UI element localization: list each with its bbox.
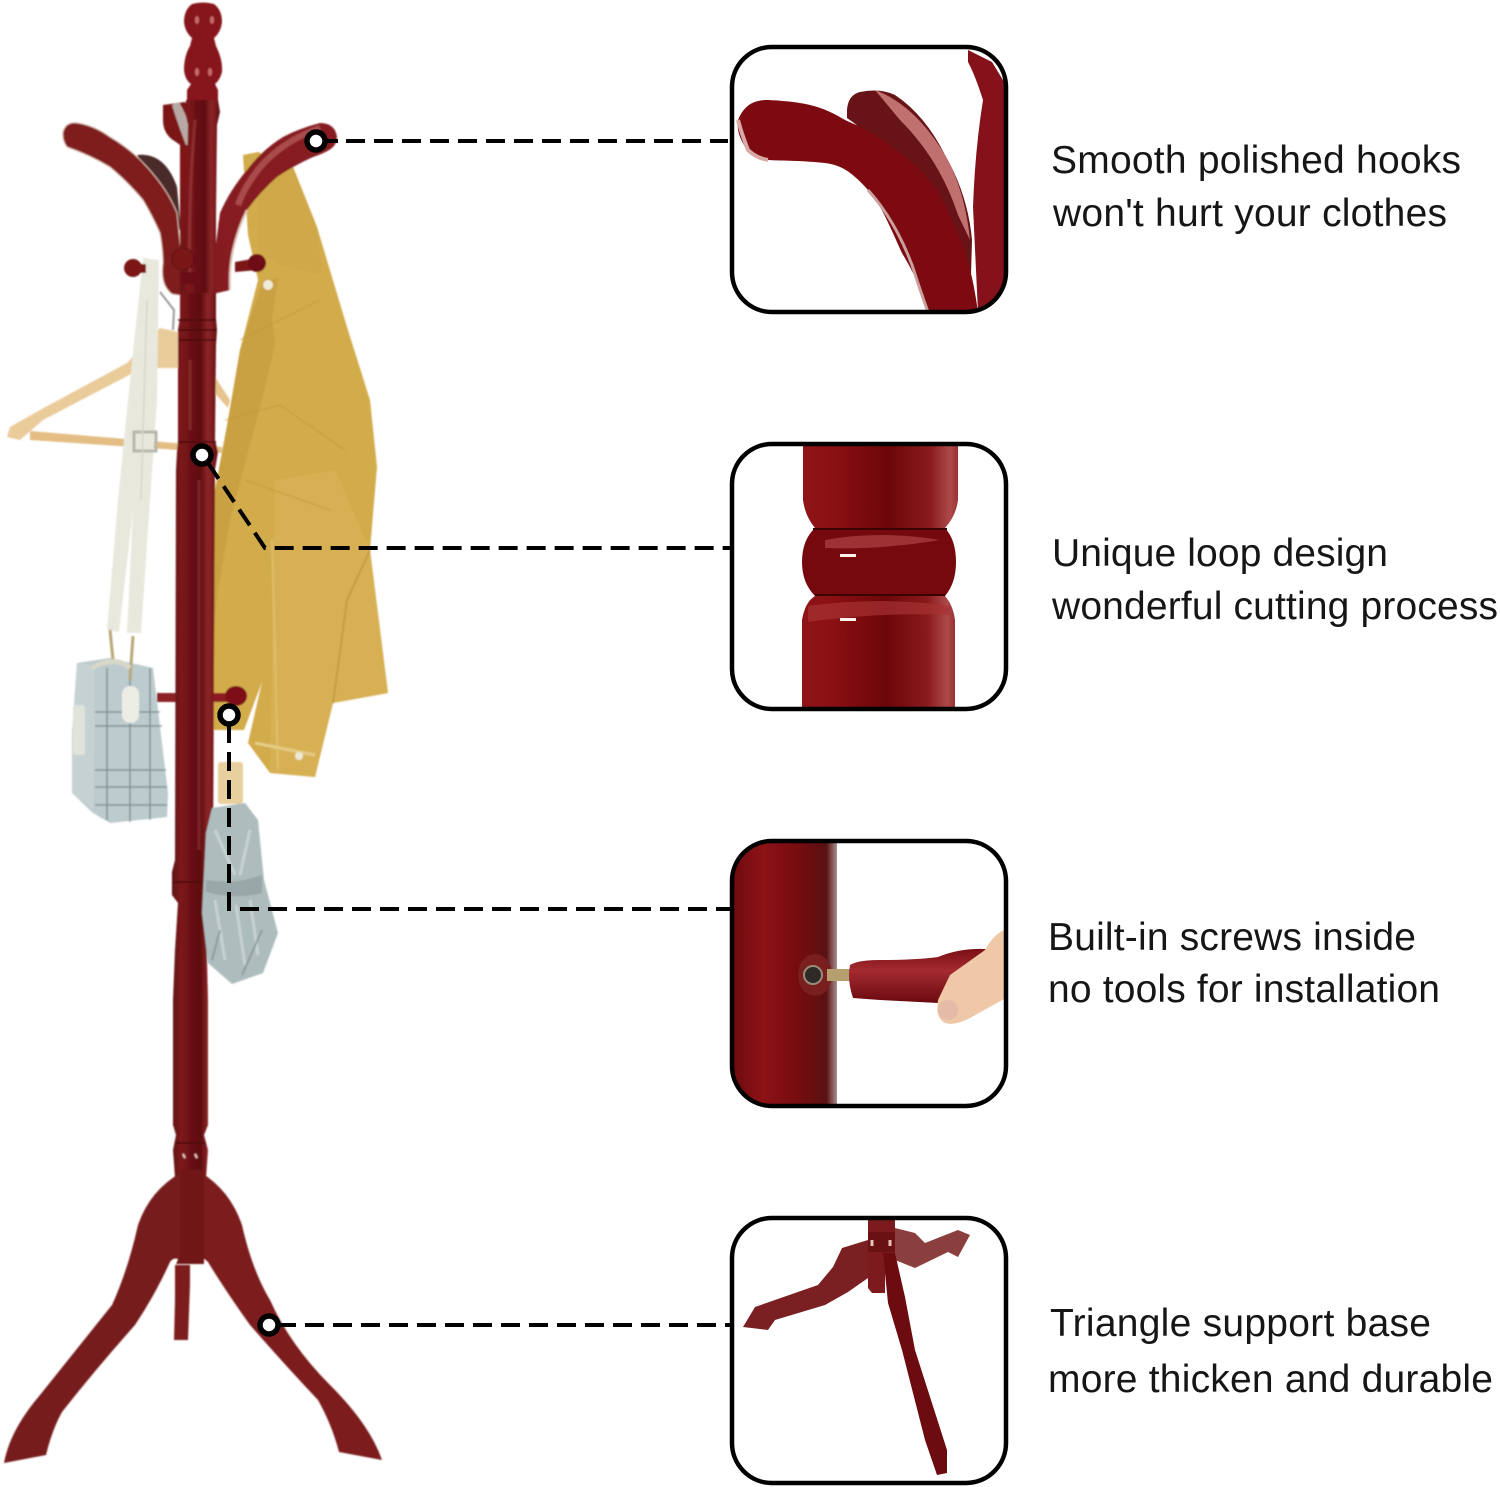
text block: loop design	[1051, 532, 1498, 628]
umbrella	[202, 762, 278, 984]
panel: screws close-up	[732, 841, 1006, 1107]
callout line: base	[260, 1316, 731, 1334]
text block: hooks: Smooth polished hooks	[1051, 139, 1461, 182]
pole: finial	[184, 2, 222, 100]
front leg	[883, 1253, 947, 1475]
panel: hooks close-up	[732, 47, 1006, 312]
rear leg	[895, 1228, 970, 1268]
text block: base	[1048, 1302, 1493, 1401]
wooden peg	[849, 949, 988, 1003]
back hook	[847, 91, 972, 275]
stem	[968, 50, 1006, 312]
text block: base: Triangle support base	[1050, 1302, 1431, 1345]
text block: hooks: won't hurt your clothes	[1052, 192, 1447, 235]
text block: screws	[1048, 916, 1440, 1011]
front hook	[738, 100, 978, 312]
panel: loop design close-up	[732, 440, 1006, 710]
post and ring	[868, 1216, 895, 1293]
pole: neck and upper column	[180, 100, 220, 295]
hook: left	[63, 123, 184, 296]
text block: loop design: wonderful cutting process	[1051, 585, 1498, 628]
screw hole	[798, 954, 832, 996]
handbag	[72, 630, 168, 823]
pegs at top	[124, 248, 266, 284]
rack pegs behind pole	[157, 686, 247, 706]
screw thread	[827, 969, 851, 981]
front curl hook	[163, 102, 198, 280]
product photo: coat rack with hanging items	[4, 2, 388, 1463]
jacket	[210, 152, 388, 777]
base: centre post	[176, 1170, 204, 1264]
bag straps	[107, 258, 159, 633]
text block: base: more thicken and durable	[1048, 1358, 1493, 1401]
hook: right, polished	[213, 123, 337, 294]
base: back leg	[174, 1265, 190, 1340]
base: left leg	[4, 1172, 182, 1463]
panel: base close-up	[732, 1216, 1006, 1483]
text block: loop design: Unique loop design	[1052, 532, 1388, 575]
wooden hanger	[7, 292, 230, 453]
text block: screws: Built-in screws inside	[1048, 916, 1416, 959]
base: right leg	[200, 1172, 382, 1460]
callout line: hooks	[307, 132, 728, 150]
left leg	[743, 1240, 868, 1330]
callout line: loop design	[193, 446, 731, 548]
finger	[937, 930, 1006, 1024]
callout line: screws	[220, 706, 731, 909]
text block: hooks	[1051, 139, 1461, 235]
pole: turned rings and main shaft	[172, 293, 218, 1178]
back hook shadows	[137, 155, 253, 232]
text block: screws: no tools for installation	[1048, 968, 1440, 1011]
